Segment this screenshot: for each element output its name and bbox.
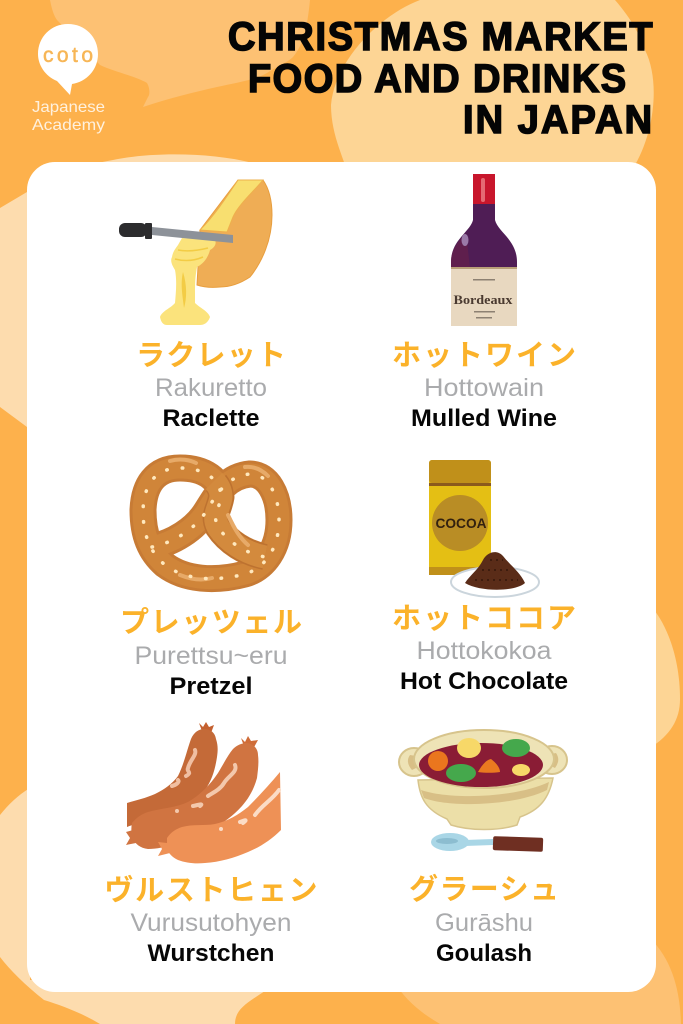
item: pretzel	[120, 460, 302, 700]
title: CHRISTMAS MARKET	[228, 15, 653, 59]
label: ホットココア	[392, 603, 576, 635]
label: ヴルストヒェン	[104, 873, 318, 907]
item: wurstchen: Vurusutohyen	[130, 909, 292, 937]
item: raclette: Raclette	[162, 405, 260, 432]
icon: raclette cheese	[119, 180, 272, 325]
panel: white card	[27, 162, 656, 992]
icon: goulash bowl	[399, 730, 567, 852]
item: goulash	[399, 730, 567, 967]
icon: wine bottle: Bordeaux	[454, 292, 513, 307]
item: raclette	[119, 180, 286, 432]
item: mulled wine	[392, 174, 576, 432]
label: グラーシュ	[409, 873, 559, 906]
logo: coto Japanese Academy: coto	[43, 44, 93, 67]
item: hot chocolate: Hot Chocolate	[400, 668, 568, 695]
item: goulash: Goulash	[436, 940, 532, 967]
label: プレッツェル	[120, 606, 302, 639]
icon: sausages	[126, 722, 281, 863]
item: mulled wine: Hottowain	[424, 374, 544, 402]
logo: coto Japanese Academy: Academy	[32, 117, 105, 134]
icon: wine bottle	[451, 174, 517, 326]
title: FOOD AND DRINKS	[248, 57, 626, 101]
logo: coto Japanese Academy	[32, 24, 105, 134]
item: mulled wine: Mulled Wine	[411, 405, 557, 432]
icon: pretzel	[143, 460, 279, 580]
label: ラクレット	[136, 340, 286, 372]
icon: speech bubble	[38, 24, 98, 95]
item: raclette: Rakuretto	[155, 374, 267, 402]
title	[228, 15, 653, 142]
icon: cocoa tin	[429, 460, 539, 597]
item: goulash: Gurāshu	[435, 909, 533, 937]
item: wurstchen: Wurstchen	[148, 940, 274, 967]
item: hot chocolate	[392, 460, 576, 695]
item: hot chocolate: Hottokokoa	[416, 637, 552, 665]
title: IN JAPAN	[463, 98, 652, 142]
item: pretzel: Pretzel	[170, 673, 252, 700]
item: wurstchen	[104, 722, 318, 967]
item: pretzel: Purettsu~eru	[134, 642, 288, 670]
logo: coto Japanese Academy: Japanese	[32, 99, 105, 116]
label: ホットワイン	[392, 340, 576, 372]
icon: cocoa tin: COCOA	[436, 515, 486, 531]
